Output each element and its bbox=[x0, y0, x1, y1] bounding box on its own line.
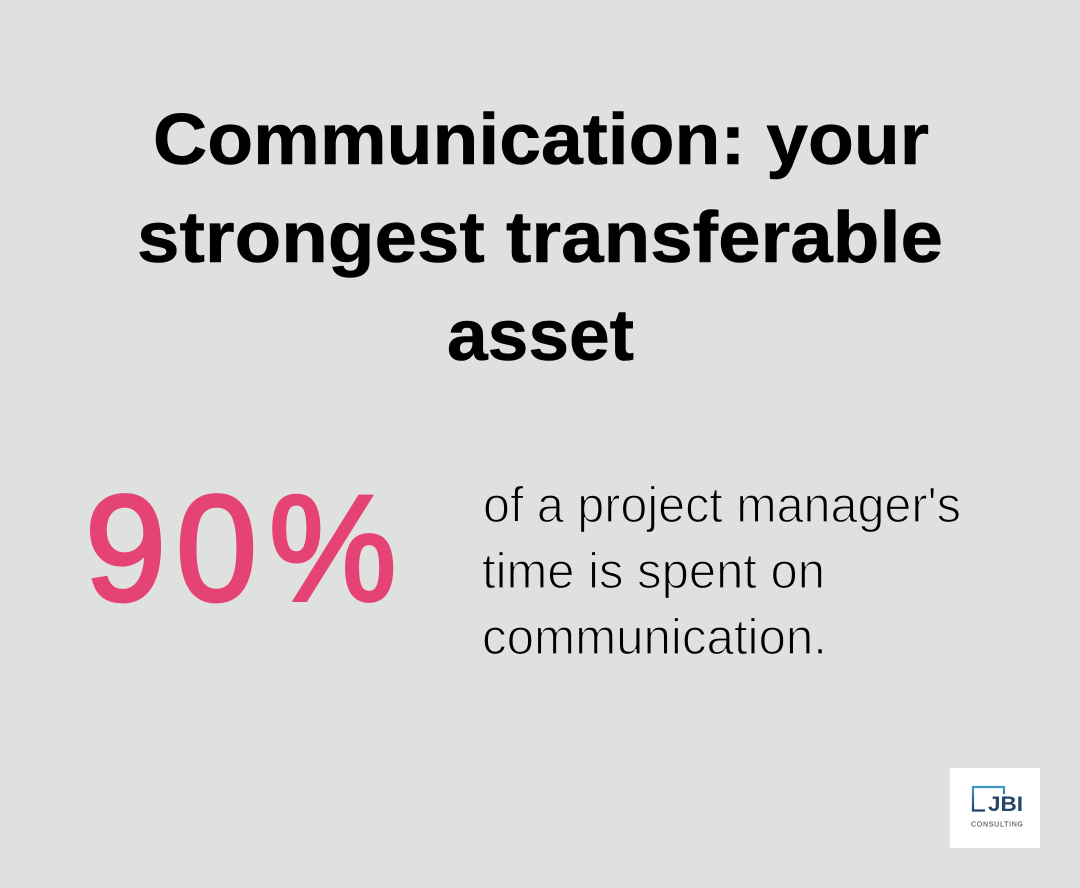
title: Communication: your bbox=[153, 100, 929, 180]
statistic description: time is spent on bbox=[482, 543, 825, 599]
statistic: 90% bbox=[85, 465, 396, 633]
logo: JBI Consulting: CONSULTING bbox=[971, 822, 1023, 828]
statistic: 90%: 0 bbox=[176, 465, 257, 632]
statistic description: communication. bbox=[482, 609, 827, 665]
statistic: 90%: 9 bbox=[85, 465, 166, 632]
title bbox=[137, 100, 943, 376]
statistic description bbox=[482, 477, 961, 665]
statistic description: of a project manager's bbox=[483, 477, 961, 533]
title: asset bbox=[447, 296, 634, 376]
title: strongest transferable bbox=[137, 198, 943, 278]
logo: JBI Consulting bbox=[950, 768, 1040, 848]
logo: JBI Consulting: JBI bbox=[988, 792, 1023, 816]
statistic: 90%: % bbox=[269, 465, 396, 633]
